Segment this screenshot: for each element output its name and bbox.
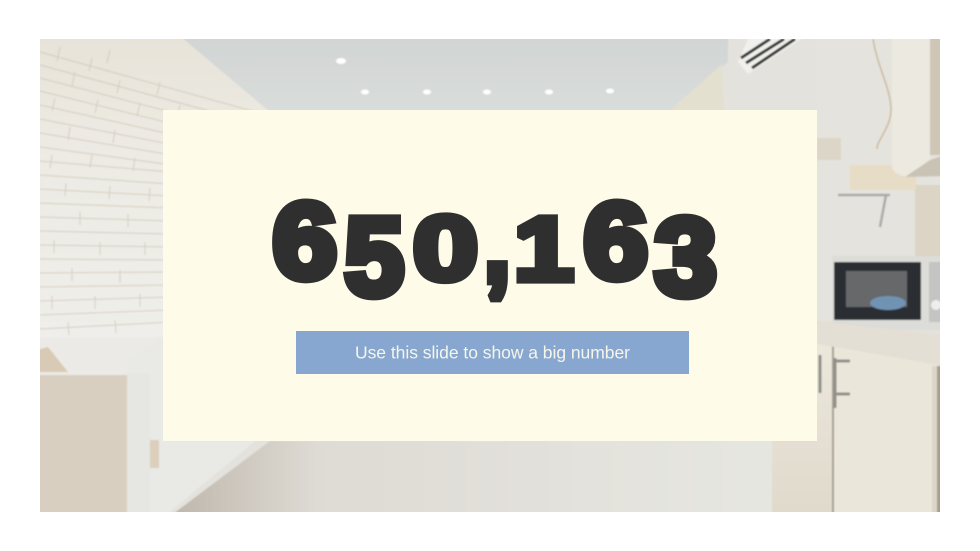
lower cabinets [772, 342, 945, 520]
big number: 6 [584, 181, 648, 301]
big number: 5 [344, 196, 404, 318]
caption bar: Use this slide to show a big number [355, 342, 630, 362]
floor [175, 441, 324, 512]
caption bar [296, 331, 689, 374]
big number: 0 [413, 198, 478, 299]
big number: , [484, 181, 510, 305]
microwave [832, 256, 945, 330]
content panel [163, 110, 817, 441]
right wall and upper cabinet [817, 39, 940, 256]
window blind [671, 65, 724, 110]
big number: 1 [514, 199, 574, 299]
brick wall [40, 39, 268, 337]
countertop [818, 322, 940, 348]
ceiling lights [336, 58, 614, 94]
slide [40, 39, 940, 512]
big number: 6 [272, 181, 337, 301]
sofa [40, 341, 252, 512]
big number [272, 181, 717, 319]
ceiling [184, 39, 728, 110]
big number: 3 [654, 196, 717, 319]
air conditioner [738, 39, 800, 74]
